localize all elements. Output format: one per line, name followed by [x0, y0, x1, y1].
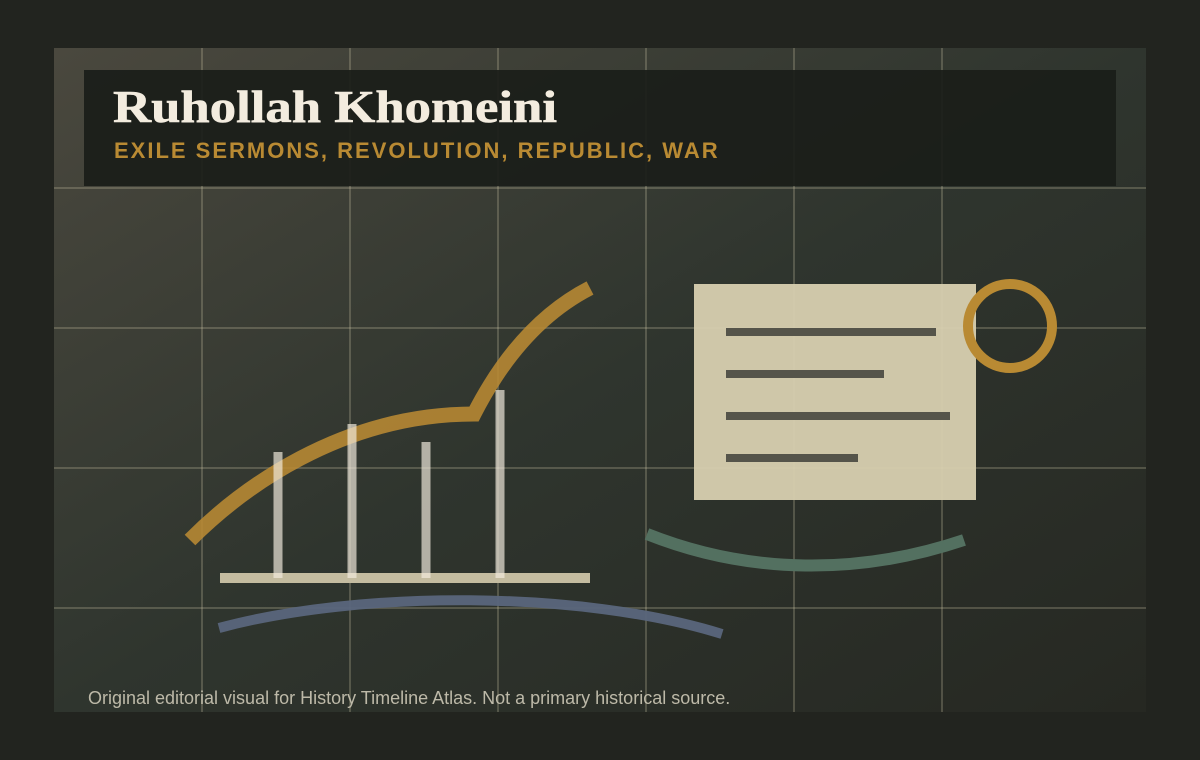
- footer note: Original editorial visual for History Timeline Atlas. Not a primary historical source.: [88, 688, 730, 708]
- header band: [84, 70, 1116, 186]
- chart baseline: [220, 573, 590, 583]
- green arc: [647, 534, 964, 566]
- document text lines: [726, 328, 950, 462]
- vertical bars: [274, 390, 504, 578]
- document card: [694, 284, 976, 500]
- grid lines: [54, 48, 1146, 712]
- title: Ruhollah Khomeini: [113, 81, 557, 132]
- blue arc: [219, 600, 722, 634]
- icon: gold seal ring: [968, 284, 1052, 368]
- panel: atlas backdrop: [54, 48, 1146, 712]
- subtitle: EXILE SERMONS, REVOLUTION, REPUBLIC, WAR: [114, 138, 720, 163]
- chart: rising line with bars: [190, 288, 590, 583]
- gold trend curve: [190, 288, 590, 540]
